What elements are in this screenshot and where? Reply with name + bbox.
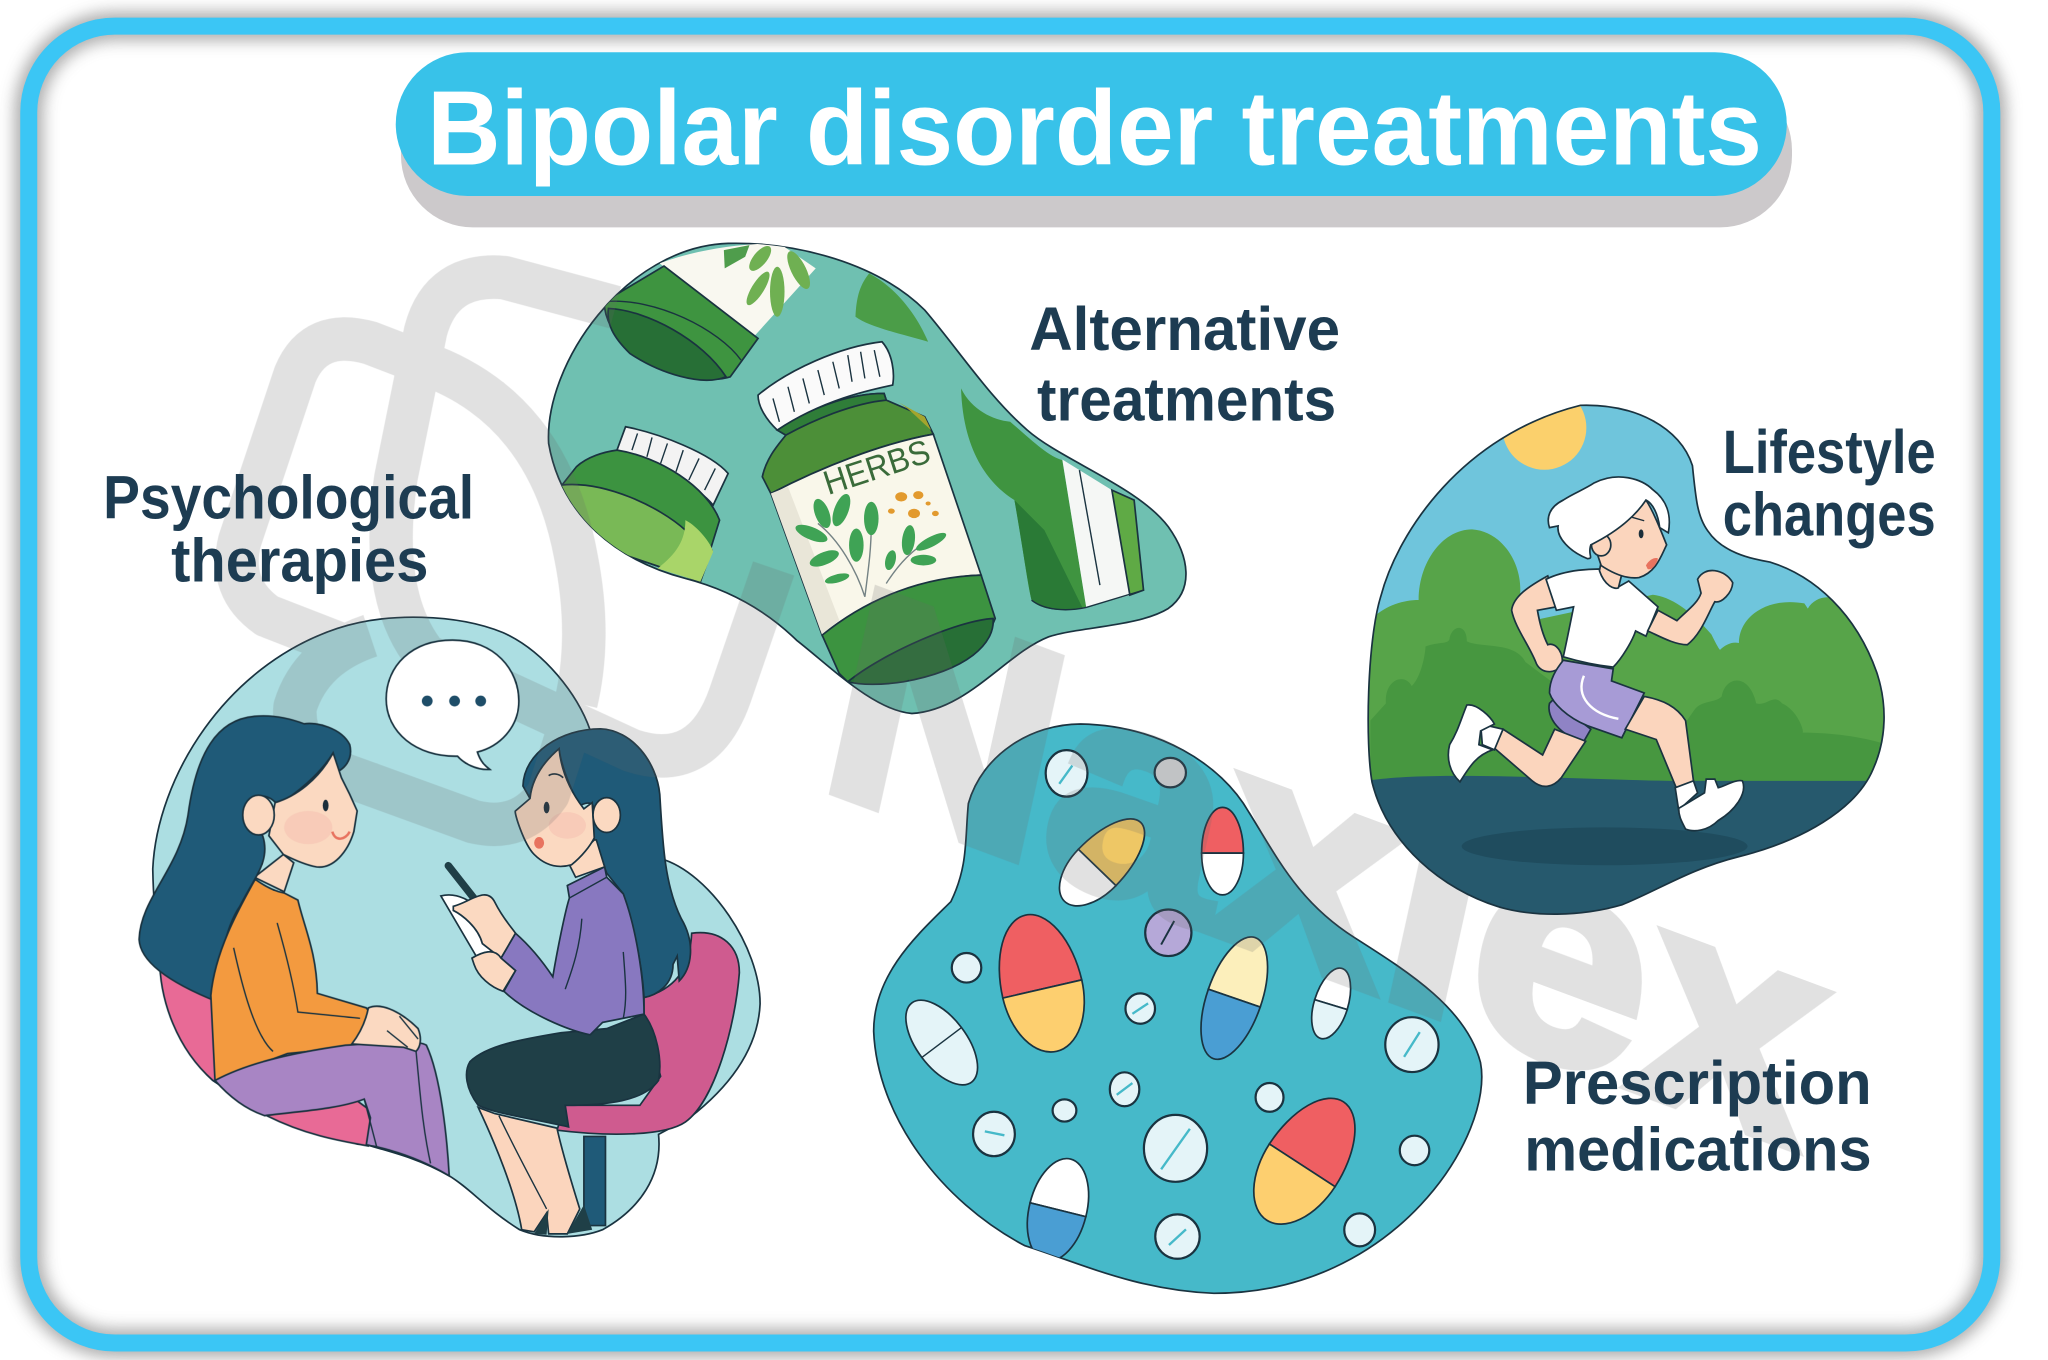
right shirt	[501, 867, 644, 1035]
leaf	[855, 273, 928, 342]
panel: alternative treatments	[548, 243, 1186, 713]
bottle label	[771, 434, 981, 635]
label: lifestyle changes: changes	[1723, 481, 1936, 550]
label: alternative treatments: treatments	[1037, 366, 1336, 435]
back arm	[1512, 576, 1562, 672]
herb sprig	[792, 493, 949, 597]
right legs	[478, 1107, 580, 1234]
capsule: red white	[1202, 807, 1243, 895]
capsule: cream blue	[1200, 936, 1268, 1060]
panel: psychological therapies	[153, 617, 760, 1237]
top bottle leaves	[724, 243, 815, 317]
watermark logo	[237, 277, 774, 824]
left hands	[352, 1006, 420, 1051]
shirt	[1546, 569, 1658, 667]
round tablets	[952, 750, 1439, 1259]
left pants	[215, 1042, 449, 1176]
skirt	[467, 1014, 660, 1127]
sun	[1504, 406, 1586, 470]
face	[1587, 500, 1667, 578]
runner	[1448, 477, 1744, 831]
label: prescription medications: Prescription	[1523, 1049, 1872, 1118]
pills	[892, 750, 1439, 1267]
right hands	[453, 895, 516, 958]
shorts	[1549, 700, 1591, 741]
bottle shoulder	[762, 393, 933, 493]
watermark wordmark: Naxlex	[801, 521, 1856, 1211]
small bottle body	[561, 450, 720, 582]
label: lifestyle changes: Lifestyle	[1723, 418, 1936, 487]
panel: prescription medications	[874, 724, 1482, 1293]
therapy figures in front of watermark	[139, 640, 519, 1176]
panel: lifestyle changes	[1367, 386, 1890, 920]
left face	[269, 753, 357, 867]
stool pole	[584, 1136, 605, 1226]
left neck	[254, 854, 294, 892]
title: Bipolar disorder treatments	[427, 70, 1762, 188]
large herb bottle	[758, 342, 995, 684]
pen	[448, 866, 480, 906]
right hair	[523, 729, 691, 998]
right woman	[441, 729, 739, 1235]
right leaf and bottle	[961, 388, 1086, 610]
front shoe	[1675, 781, 1698, 810]
dark foliage	[1370, 628, 1887, 783]
blob background	[548, 243, 1186, 713]
hair	[1548, 477, 1669, 559]
capsule: red yellow large	[1252, 1098, 1356, 1225]
shoes	[534, 1205, 592, 1235]
front leg	[1625, 696, 1693, 789]
blob background	[874, 724, 1482, 1293]
trees	[1367, 529, 1890, 783]
notebook	[441, 895, 491, 956]
title banner	[396, 52, 1792, 227]
right neck	[569, 840, 605, 877]
herb bottles	[561, 243, 1144, 684]
left woman	[139, 716, 449, 1176]
runner shadow	[1462, 827, 1748, 865]
label: psychological therapies: therapies	[171, 526, 428, 595]
capsule: red yellow	[998, 914, 1086, 1053]
bottle label text: HERBS	[819, 433, 935, 503]
right face	[515, 749, 594, 866]
front arm	[1648, 571, 1733, 645]
capsule: yellow white	[1058, 818, 1146, 907]
road	[1367, 776, 1887, 920]
top bottle cap	[604, 266, 758, 379]
title banner pill	[396, 52, 1787, 196]
capsule: white pale	[1310, 967, 1352, 1040]
watermark	[237, 277, 1856, 1211]
left shirt	[211, 879, 375, 1080]
label: alternative treatments: Alternative	[1029, 295, 1340, 364]
orange flowers	[888, 491, 939, 518]
blob background	[153, 617, 760, 1237]
oval scored tablet	[905, 999, 978, 1086]
back leg	[1494, 729, 1586, 786]
blob sky	[1368, 405, 1884, 914]
tablet score marks	[985, 766, 1420, 1245]
speech bubble	[386, 640, 519, 770]
small bottle cap	[617, 427, 728, 505]
blob outline	[1368, 405, 1884, 914]
title banner shadow	[401, 78, 1792, 227]
back shoe	[1481, 724, 1503, 750]
scenery	[1367, 386, 1890, 920]
small bottle	[561, 427, 728, 582]
left hair	[139, 716, 350, 1002]
neck	[1599, 562, 1622, 588]
label: prescription medications: medications	[1524, 1116, 1872, 1185]
capsule: white blue	[1026, 1158, 1090, 1258]
bottle base	[822, 575, 995, 682]
label: psychological therapies: Psychological	[103, 464, 474, 533]
right chair	[557, 933, 739, 1134]
top bottle label	[660, 243, 816, 337]
left chair	[160, 948, 375, 1146]
bottle cap	[758, 342, 893, 430]
